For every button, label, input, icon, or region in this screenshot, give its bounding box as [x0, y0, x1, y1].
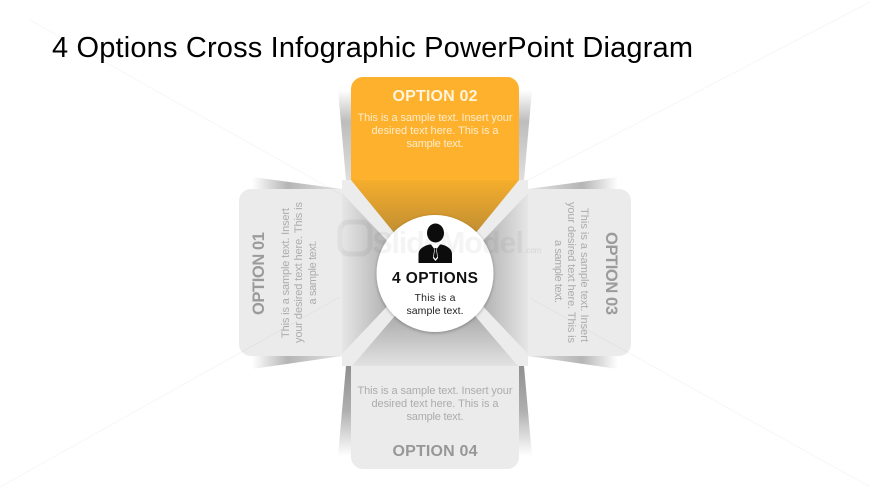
option 02 heading: OPTION 02	[392, 88, 478, 105]
option 03 text: a sample text.	[552, 240, 564, 303]
option 01 heading: OPTION 01	[250, 232, 268, 315]
option 04 text	[358, 385, 513, 423]
option 01 text: a sample text.	[307, 240, 319, 304]
panel: option 01	[239, 189, 342, 356]
option 01 text: your desired text here. This is	[293, 202, 305, 343]
panel: option 02	[351, 77, 519, 240]
option 02 text: This is a sample text. Insert your	[358, 112, 513, 124]
panel: option 03	[528, 189, 631, 356]
shadow fans behind cards	[252, 90, 618, 456]
center square base	[342, 180, 528, 366]
option 04 text: sample text.	[406, 411, 464, 423]
option 02 text	[358, 112, 513, 150]
center text	[406, 292, 464, 317]
option 04 text: This is a sample text. Insert your	[358, 385, 513, 397]
option 01 text: This is a sample text. Insert	[280, 208, 292, 338]
watermark: SlideModel	[372, 225, 524, 260]
panel: option 04	[351, 366, 519, 469]
option 03 text	[552, 202, 590, 344]
option 03 text: This is a sample text. Insert	[578, 208, 590, 342]
center text: This is a	[414, 292, 456, 304]
option 04 text: desired text here. This is a	[372, 398, 499, 410]
option 02 text: desired text here. This is a	[372, 125, 499, 137]
icon: businessman	[418, 224, 452, 263]
center wedges	[342, 193, 528, 366]
option 03 text: your desired text here. This is	[565, 202, 577, 344]
center heading: 4 OPTIONS	[392, 270, 478, 287]
watermark	[340, 222, 542, 260]
option 04 heading: OPTION 04	[392, 443, 478, 460]
title: 4 Options Cross Infographic PowerPoint Diagram	[52, 32, 693, 64]
center text: sample text.	[406, 305, 464, 317]
watermark: .com	[524, 246, 542, 255]
option 02 text: sample text.	[406, 138, 464, 150]
center circle	[340, 215, 542, 332]
option 03 heading: OPTION 03	[602, 232, 620, 315]
option 01 text	[280, 202, 319, 343]
